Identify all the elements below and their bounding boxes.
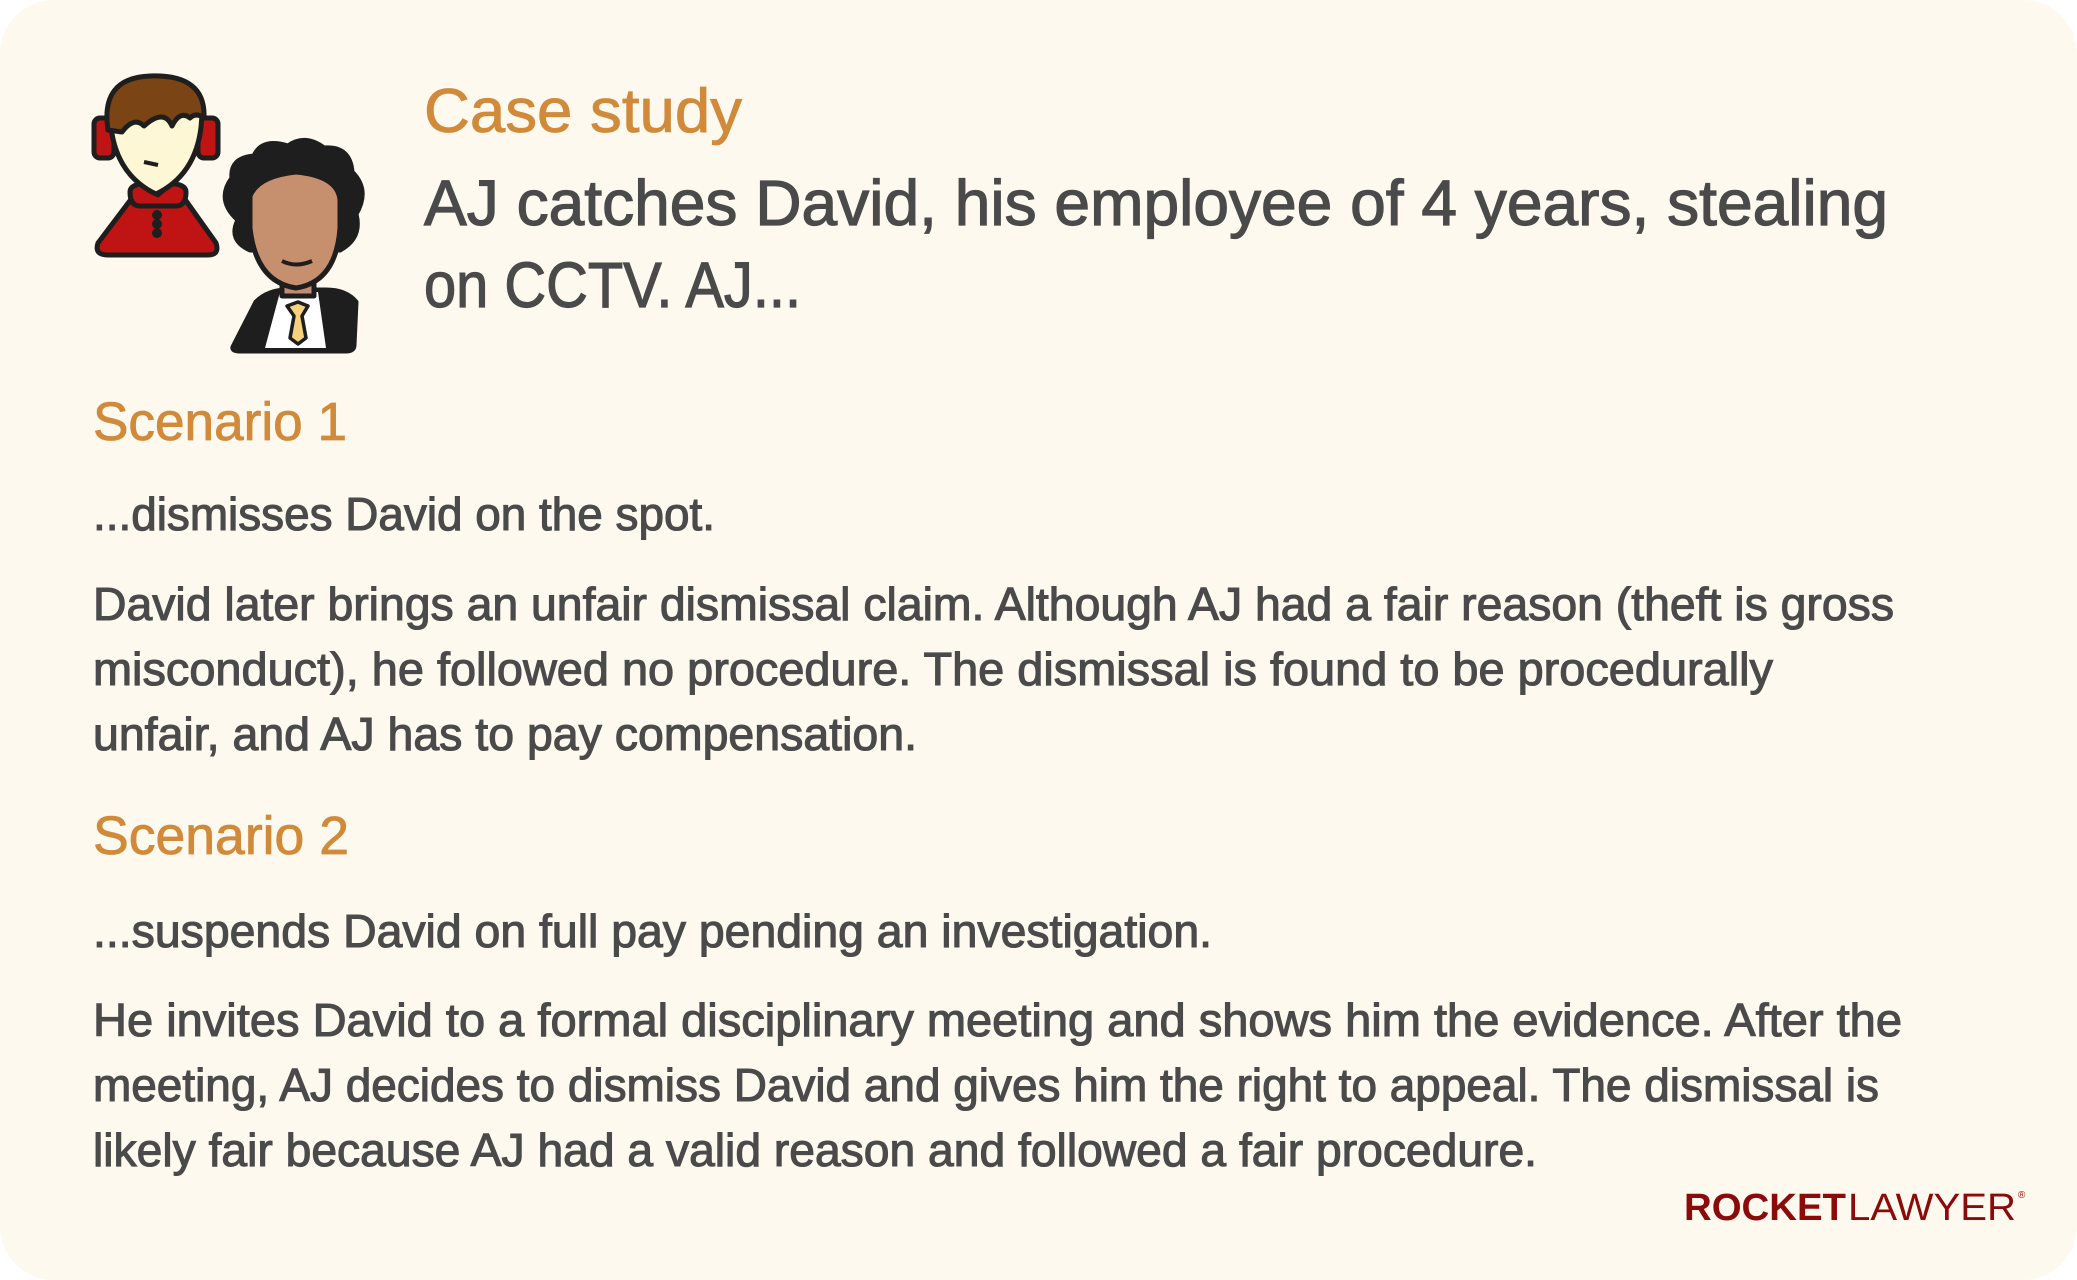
text block: scenario 2: meeting, AJ decides to dismiss David and gives him the right to appeal. The dismissal is — [93, 1059, 1879, 1111]
text block: scenario 2: He invites David to a formal disciplinary meeting and shows him the evidence. After the — [93, 994, 1902, 1046]
text block: scenario 1: unfair, and AJ has to pay compensation. — [93, 708, 917, 760]
heading: scenario 1: Scenario 1 — [93, 392, 347, 452]
text block: scenario 1 — [93, 488, 1894, 760]
logo: rocket lawyer: ® — [2018, 1190, 2026, 1201]
text block: scenario 2: ...suspends David on full pay pending an investigation. — [93, 905, 1212, 957]
text block: scenario 1: ...dismisses David on the spot. — [93, 488, 715, 540]
icon: person with tie — [225, 140, 362, 351]
heading: AJ catches David, his employee of 4 years, stealing — [424, 167, 1888, 239]
icon: two people — [94, 76, 362, 351]
text block: scenario 2 — [93, 905, 1902, 1176]
heading — [424, 167, 1888, 321]
logo: rocket lawyer — [1684, 1187, 2026, 1229]
heading: on CCTV. AJ... — [424, 249, 801, 321]
text block: scenario 2: likely fair because AJ had a valid reason and followed a fair procedure. — [93, 1124, 1537, 1176]
text block: scenario 1: David later brings an unfair dismissal claim. Although AJ had a fair reason (theft is gross — [93, 578, 1894, 630]
title: case study: Case study — [424, 77, 742, 146]
icon: person with headphones — [94, 76, 218, 255]
heading: scenario 2: Scenario 2 — [93, 806, 349, 866]
logo: rocket lawyer: ROCKET — [1684, 1187, 1846, 1229]
text block: scenario 1: misconduct), he followed no procedure. The dismissal is found to be procedurally — [93, 643, 1773, 695]
logo: rocket lawyer: LAWYER — [1848, 1187, 2016, 1229]
